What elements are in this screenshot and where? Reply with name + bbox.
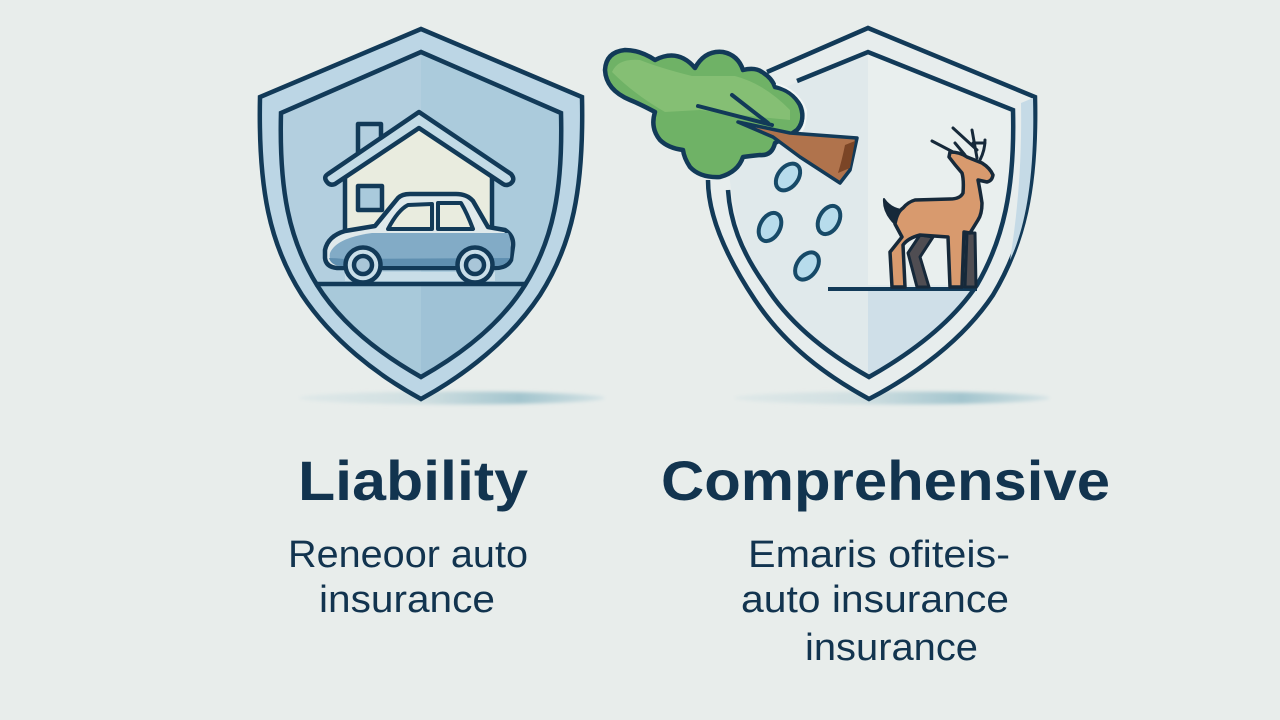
text block: liability description: insurance [319,579,495,621]
text block: comprehensive description: insurance [805,627,978,669]
ground line [828,287,977,291]
icon: hail drops [754,159,845,284]
text block: comprehensive description [741,534,1010,669]
panel: liability shield [260,29,605,404]
infographic canvas [258,26,1108,660]
text block: liability description: Reneoor auto [288,534,528,576]
outer shield [260,29,582,399]
icon: car [325,194,513,282]
title: Liability: Liability [298,449,528,512]
icon: falling tree [605,50,857,183]
inner shield [725,52,1033,389]
panel: comprehensive shield [605,28,1050,404]
icon: house [325,112,513,232]
shield shadow [734,392,1050,404]
ground line [315,282,526,286]
icon: deer [884,128,993,287]
text block: liability description [288,534,528,621]
shield shadow [299,392,605,404]
inner shield [280,50,566,384]
outer shield [708,28,1035,399]
text block: comprehensive description: auto insurance [741,579,1009,621]
text block: comprehensive description: Emaris ofiteis- [748,534,1010,576]
title: Comprehensive: Comprehensive [661,449,1110,512]
